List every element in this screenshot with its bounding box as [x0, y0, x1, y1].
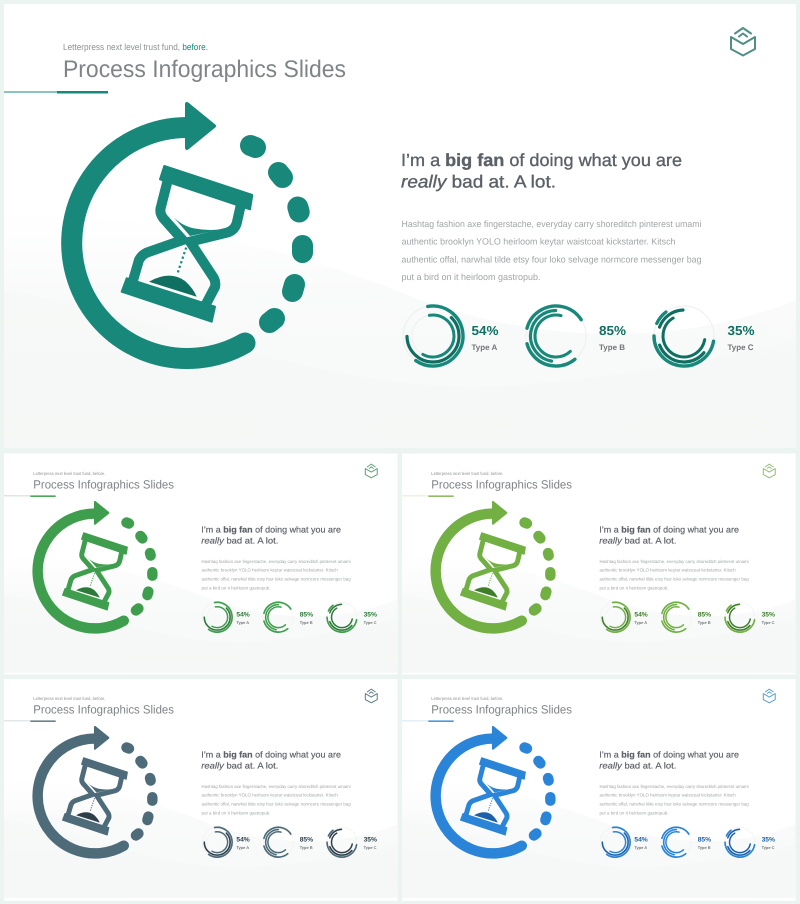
- stat: 35% Type C: [364, 611, 377, 625]
- body paragraph: [202, 784, 351, 815]
- slide background: [402, 677, 796, 901]
- stat: 35% Type C: [762, 836, 775, 850]
- eyebrow text: Letterpress next level trust fund, before.: [33, 696, 105, 701]
- eyebrow text: Letterpress next level trust fund, before.: [431, 696, 503, 701]
- stat: 35% Type C: [364, 836, 377, 850]
- headline: I’m a big fan of doing what you are: [599, 750, 739, 760]
- body paragraph: put a bird on it heirloom gastropub.: [600, 585, 669, 590]
- title underline: [4, 720, 56, 722]
- body paragraph: [402, 219, 702, 282]
- icon: hourglass with circular arrow: [38, 502, 152, 628]
- donut chart: Type A: [199, 599, 235, 635]
- body paragraph: Hashtag fashion axe fingerstache, everyday carry shoreditch pinterest umami: [202, 559, 351, 564]
- body paragraph: Hashtag fashion axe fingerstache, everyday carry shoreditch pinterest umami: [600, 784, 749, 789]
- donut chart: Type A: [597, 824, 633, 860]
- stat: 54% Type A: [634, 836, 648, 850]
- stat: 85% Type B: [698, 836, 711, 850]
- body paragraph: authentic brooklyn YOLO heirloom keytar waistcoat kickstarter. Kitsch: [202, 568, 338, 573]
- headline: really bad at. A lot.: [599, 535, 676, 545]
- stat: 35% Type C: 35%: [364, 611, 377, 618]
- headline: I’m a big fan of doing what you are: [401, 150, 682, 170]
- panel: blue slide: [402, 677, 796, 901]
- eyebrow text: Letterpress next level trust fund, before.: [63, 42, 208, 52]
- headline: really bad at. A lot.: [599, 760, 676, 770]
- panel: slate slide: [4, 677, 398, 901]
- stat: 85% Type B: [698, 611, 711, 625]
- body paragraph: authentic brooklyn YOLO heirloom keytar waistcoat kickstarter. Kitsch: [202, 793, 338, 798]
- stat: 54% Type A: 54%: [472, 323, 499, 338]
- donut chart: Type B: [514, 294, 598, 378]
- title underline: [4, 91, 108, 94]
- stat: 54% Type A: Type A: [472, 343, 498, 352]
- stat: 54% Type A: [236, 611, 250, 625]
- donut chart: Type B: [257, 596, 299, 638]
- eyebrow text: Letterpress next level trust fund, before.: [33, 471, 105, 476]
- icon: hourglass with circular arrow: [38, 727, 152, 853]
- icon: hourglass with circular arrow: [436, 502, 550, 628]
- body paragraph: [600, 559, 749, 590]
- stat: 85% Type B: Type B: [698, 621, 711, 625]
- headline: [599, 525, 739, 545]
- title underline: [4, 495, 56, 497]
- body paragraph: authentic brooklyn YOLO heirloom keytar waistcoat kickstarter. Kitsch: [402, 236, 676, 246]
- donut chart: Type C: [644, 296, 724, 376]
- body paragraph: authentic offal, narwhal tilde etsy four loko selvage normcore messenger bag: [202, 577, 351, 582]
- body paragraph: put a bird on it heirloom gastropub.: [402, 272, 540, 282]
- logo: cube icon: [731, 28, 755, 56]
- donut chart: Type B: [655, 596, 697, 638]
- logo: cube icon: [763, 464, 775, 478]
- body paragraph: [202, 559, 351, 590]
- body paragraph: Hashtag fashion axe fingerstache, everyday carry shoreditch pinterest umami: [600, 559, 749, 564]
- slide background: [4, 452, 398, 676]
- stat: 54% Type A: 54%: [634, 611, 648, 618]
- stat: 54% Type A: [634, 611, 648, 625]
- body paragraph: [600, 784, 749, 815]
- stat: 85% Type B: [300, 836, 313, 850]
- stat: 35% Type C: Type C: [762, 621, 775, 625]
- body paragraph: authentic offal, narwhal tilde etsy four loko selvage normcore messenger bag: [202, 802, 351, 807]
- stat: 54% Type A: Type A: [236, 846, 249, 850]
- stat: 35% Type C: Type C: [728, 343, 754, 352]
- stat: 85% Type B: 85%: [599, 323, 626, 338]
- donut chart: Type C: [720, 822, 760, 862]
- slide background: [4, 677, 398, 901]
- body paragraph: authentic brooklyn YOLO heirloom keytar waistcoat kickstarter. Kitsch: [600, 793, 736, 798]
- stat: 85% Type B: [300, 611, 313, 625]
- headline: I’m a big fan of doing what you are: [201, 525, 341, 535]
- stat: 85% Type B: [599, 323, 626, 352]
- stat: 85% Type B: Type B: [300, 846, 313, 850]
- stat: 85% Type B: 85%: [300, 836, 313, 843]
- logo: cube icon: [763, 689, 775, 703]
- title underline: [402, 495, 454, 497]
- stat: 54% Type A: Type A: [634, 621, 647, 625]
- stat: 54% Type A: [236, 836, 250, 850]
- stat: 54% Type A: 54%: [236, 836, 250, 843]
- body paragraph: put a bird on it heirloom gastropub.: [600, 810, 669, 815]
- donut chart: Type B: [257, 821, 299, 863]
- title underline: [402, 720, 454, 722]
- slide background: [402, 452, 796, 676]
- body paragraph: authentic brooklyn YOLO heirloom keytar waistcoat kickstarter. Kitsch: [600, 568, 736, 573]
- stat: 85% Type B: Type B: [300, 621, 313, 625]
- stat: 35% Type C: 35%: [728, 323, 755, 338]
- stat: 35% Type C: Type C: [762, 846, 775, 850]
- headline: I’m a big fan of doing what you are: [599, 525, 739, 535]
- headline: [201, 750, 341, 770]
- body paragraph: put a bird on it heirloom gastropub.: [202, 585, 271, 590]
- panel: light green slide: [402, 452, 796, 676]
- headline: really bad at. A lot.: [401, 172, 556, 192]
- donut chart: Type A: [396, 299, 470, 373]
- donut chart: Type A: [199, 824, 235, 860]
- title: Process Infographics Slides: [431, 703, 572, 716]
- title: Process Infographics Slides: [33, 478, 174, 491]
- title: Process Infographics Slides: [33, 703, 174, 716]
- logo: cube icon: [365, 689, 377, 703]
- donut chart: Type A: [597, 599, 633, 635]
- headline: really bad at. A lot.: [201, 760, 278, 770]
- title: Process Infographics Slides: [431, 478, 572, 491]
- stat: 54% Type A: 54%: [634, 836, 648, 843]
- body paragraph: Hashtag fashion axe fingerstache, everyday carry shoreditch pinterest umami: [202, 784, 351, 789]
- stat: 85% Type B: 85%: [300, 611, 313, 618]
- stat: 35% Type C: 35%: [762, 611, 775, 618]
- icon: hourglass with circular arrow: [72, 104, 303, 358]
- headline: [401, 150, 682, 192]
- stat: 85% Type B: 85%: [698, 836, 711, 843]
- stat: 35% Type C: [728, 323, 755, 352]
- stat: 35% Type C: 35%: [364, 836, 377, 843]
- panel: green slide: [4, 452, 398, 676]
- donut chart: Type C: [720, 597, 760, 637]
- headline: really bad at. A lot.: [201, 535, 278, 545]
- stat: 54% Type A: Type A: [634, 846, 647, 850]
- stat: 54% Type A: 54%: [236, 611, 250, 618]
- slide background: [4, 4, 796, 448]
- stat: 35% Type C: Type C: [364, 846, 377, 850]
- panel: main teal slide: [4, 4, 796, 448]
- icon: hourglass with circular arrow: [436, 727, 550, 853]
- headline: [201, 525, 341, 545]
- title: Process Infographics Slides: [63, 56, 346, 83]
- stat: 54% Type A: Type A: [236, 621, 249, 625]
- donut chart: Type C: [322, 597, 362, 637]
- stat: 85% Type B: 85%: [698, 611, 711, 618]
- body paragraph: authentic offal, narwhal tilde etsy four loko selvage normcore messenger bag: [600, 577, 749, 582]
- body paragraph: authentic offal, narwhal tilde etsy four loko selvage normcore messenger bag: [402, 254, 702, 264]
- eyebrow text: Letterpress next level trust fund, before.: [431, 471, 503, 476]
- logo: cube icon: [365, 464, 377, 478]
- body paragraph: authentic offal, narwhal tilde etsy four loko selvage normcore messenger bag: [600, 802, 749, 807]
- donut chart: Type C: [322, 822, 362, 862]
- body paragraph: Hashtag fashion axe fingerstache, everyday carry shoreditch pinterest umami: [402, 219, 702, 229]
- headline: [599, 750, 739, 770]
- stat: 35% Type C: [762, 611, 775, 625]
- stat: 35% Type C: Type C: [364, 621, 377, 625]
- stat: 85% Type B: Type B: [698, 846, 711, 850]
- stat: 35% Type C: 35%: [762, 836, 775, 843]
- donut chart: Type B: [655, 821, 697, 863]
- body paragraph: put a bird on it heirloom gastropub.: [202, 810, 271, 815]
- stat: 85% Type B: Type B: [599, 343, 625, 352]
- headline: I’m a big fan of doing what you are: [201, 750, 341, 760]
- stat: 54% Type A: [472, 323, 499, 352]
